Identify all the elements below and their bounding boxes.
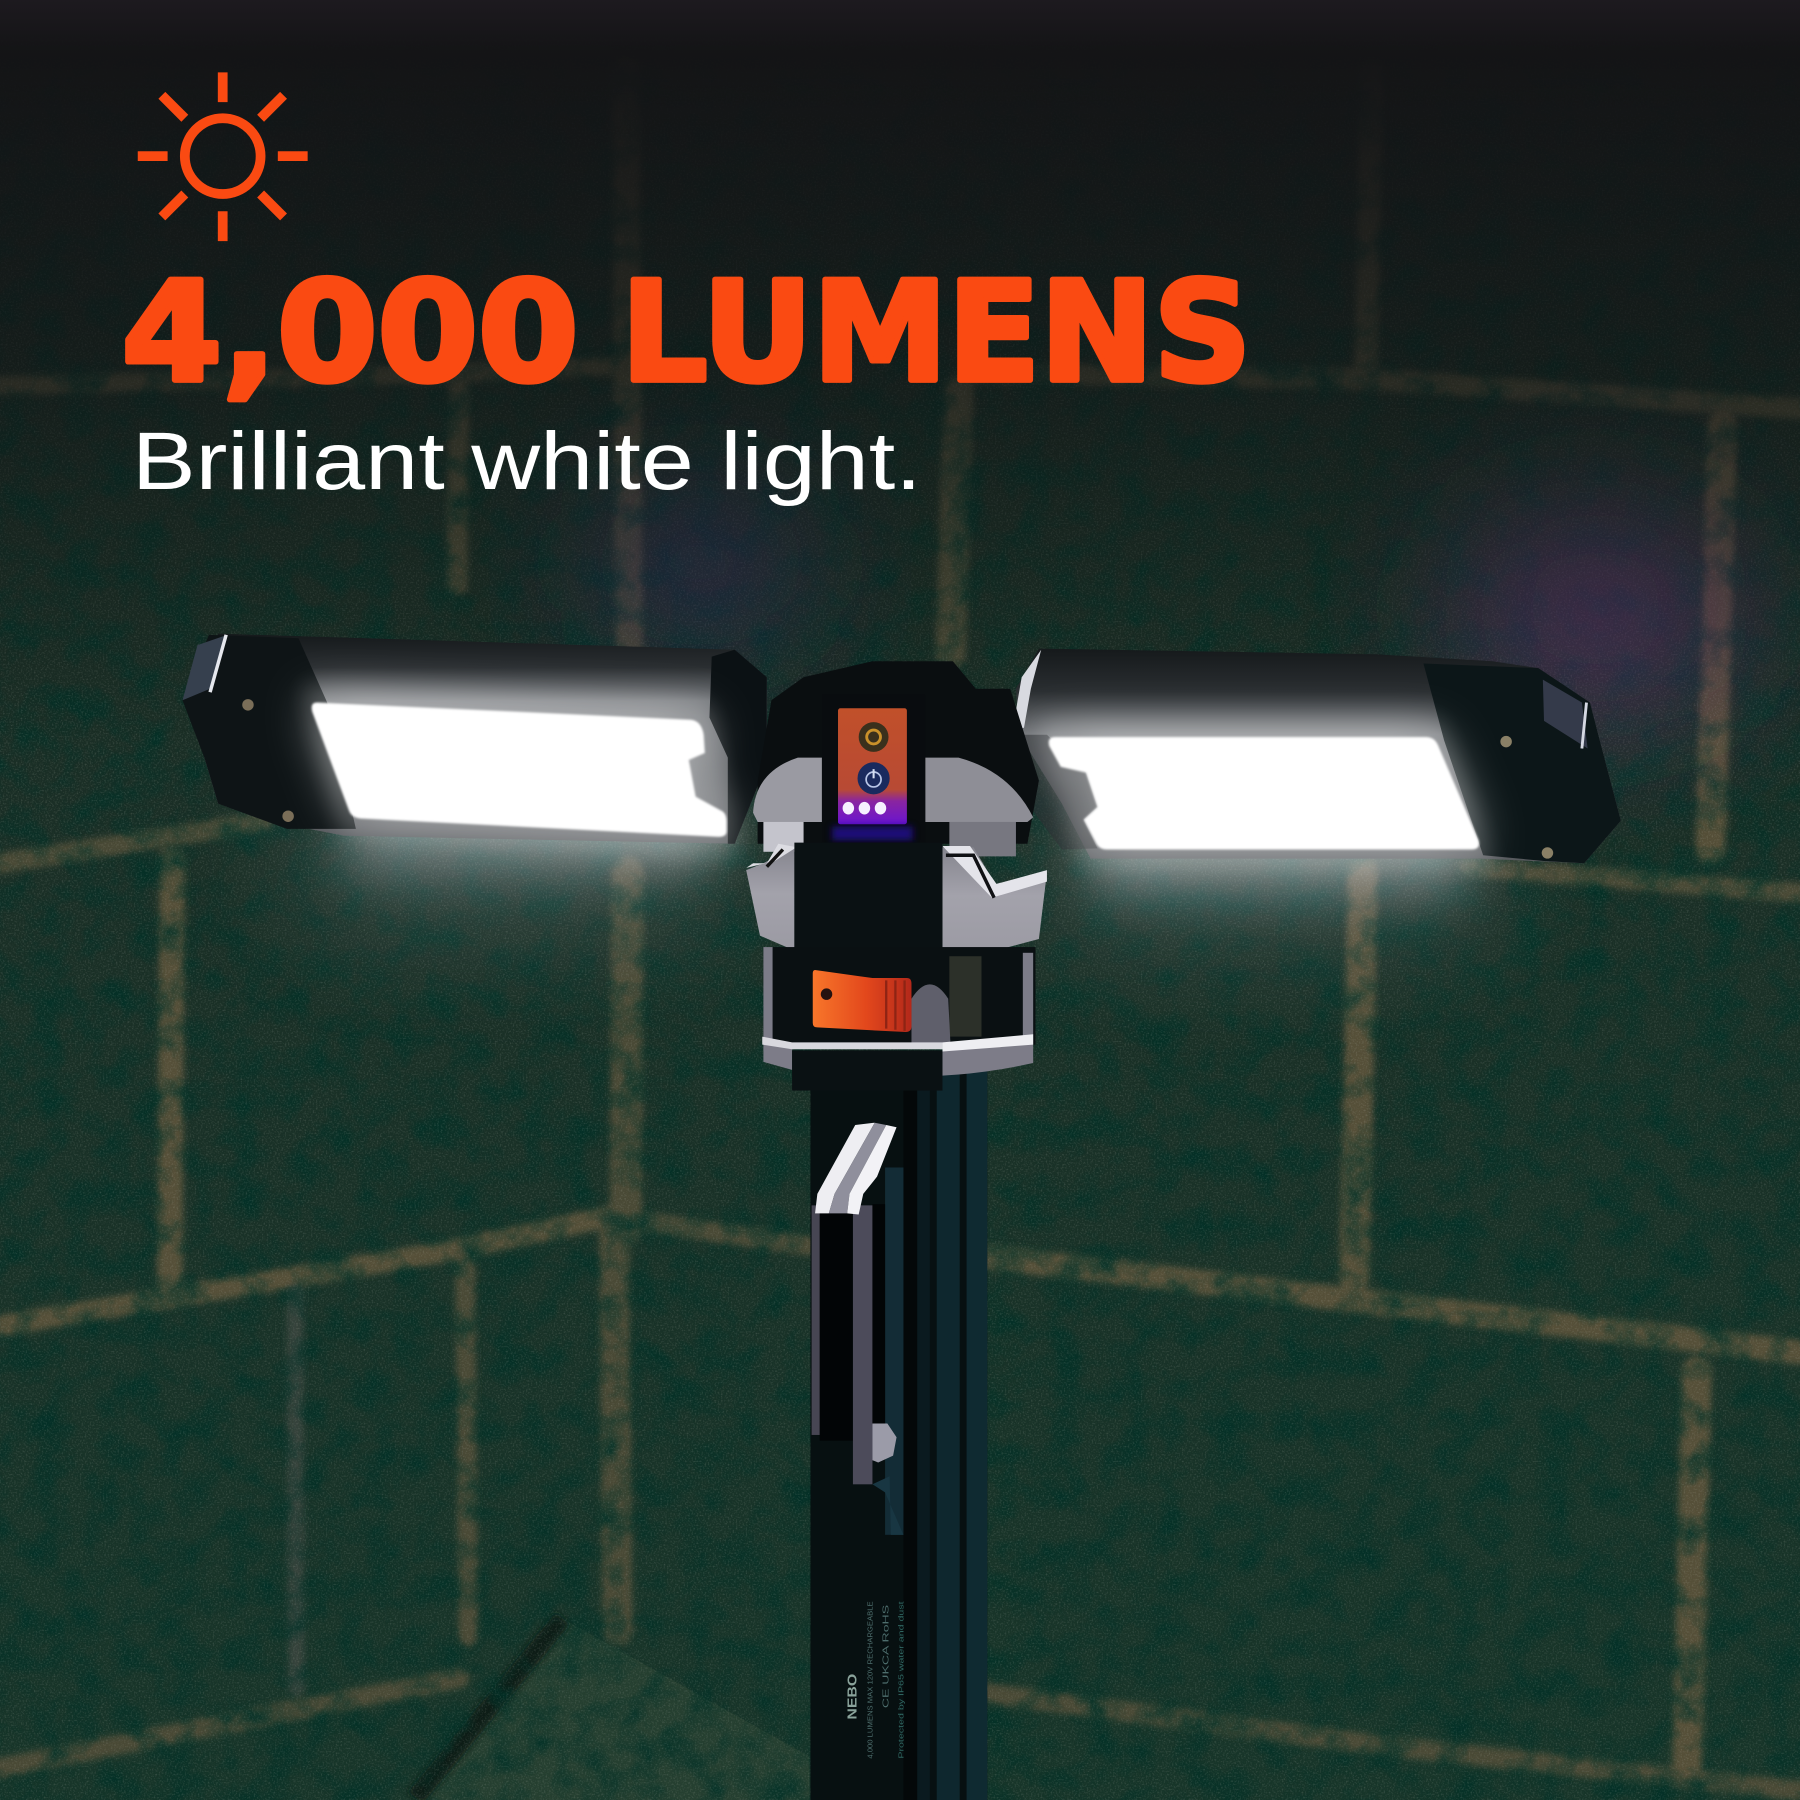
mode button: [859, 722, 889, 752]
product label: CE UKCA RoHS: [882, 1605, 891, 1708]
left end cap: [183, 635, 356, 829]
handle: [812, 1123, 903, 1535]
orange latch: [813, 970, 911, 1032]
control panel: [832, 708, 913, 840]
subheading: Brilliant white light.: [132, 416, 922, 507]
light halo: [312, 693, 1483, 859]
central column: [746, 661, 1047, 1091]
icon: sun: [138, 72, 308, 241]
lamp glow on wall: [321, 792, 1469, 907]
cage: [763, 947, 1035, 1045]
right end cap: [1423, 664, 1621, 863]
upper hub: [758, 661, 1039, 844]
floor wedge: [416, 1619, 809, 1800]
product label: Protected by IP65 water and dust: [898, 1601, 905, 1759]
power button: [858, 762, 890, 794]
product label: [845, 1601, 905, 1759]
pole: [810, 1068, 987, 1800]
purple wall tint: [597, 494, 1745, 712]
right lamp head: [1010, 649, 1621, 863]
lower body: [746, 847, 794, 951]
dome: [753, 758, 822, 822]
base ring: [762, 1034, 1033, 1091]
product label: NEBO: [845, 1673, 859, 1720]
battery indicators: [843, 802, 886, 814]
left lamp head: [183, 634, 767, 844]
heading: LUMENS: [621, 253, 1251, 413]
left light panel: [311, 703, 727, 837]
top darkening: [0, 0, 1800, 735]
heading: [122, 253, 1251, 413]
heading: 4,000: [122, 253, 579, 413]
work light product: [183, 634, 1621, 1800]
right light panel: [1049, 737, 1480, 848]
product label: 4,000 LUMENS MAX 120V RECHARGEABLE: [867, 1601, 874, 1759]
